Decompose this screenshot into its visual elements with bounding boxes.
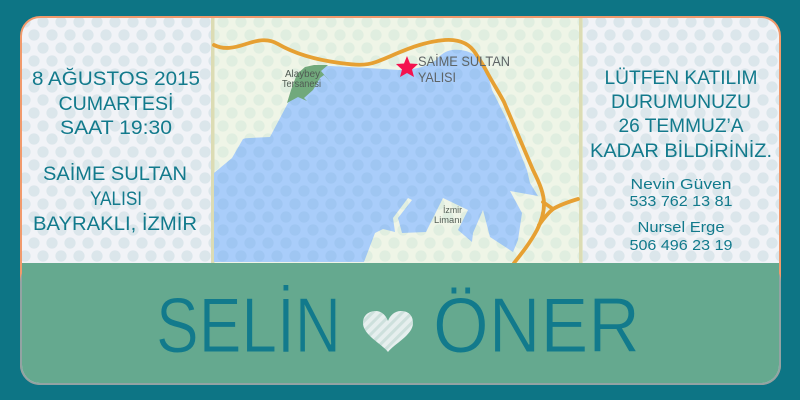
left text: date and venue: SAİME SULTAN [43,162,187,185]
roads [214,40,578,263]
label: shipyard: Tersanesi [282,79,321,90]
label: venue [418,54,510,85]
left text: date and venue: CUMARTESİ [58,92,174,115]
label: port [434,205,462,223]
label: shipyard [282,70,320,87]
name: bride: SELİN [156,281,341,369]
right text: contacts: 533 762 13 81 [630,193,732,210]
label: shipyard: Alaybey [285,69,320,80]
name band [22,263,779,383]
label: venue: YALISI [418,70,456,85]
label: venue: SAİME SULTAN [418,54,510,69]
left text: date and venue [32,67,200,235]
right text: RSVP: KADAR BİLDİRİNİZ. [590,139,772,162]
right text: RSVP: DURUMUNUZU [611,91,751,113]
label: port: Limanı [434,215,462,226]
icon: heart [363,311,413,352]
right text: contacts [630,176,732,254]
right text: contacts: Nursel Erge [638,219,724,236]
right text: contacts: 506 496 23 19 [630,237,732,254]
panel: map [211,18,583,264]
left text: date and venue: BAYRAKLI, İZMİR [33,212,197,235]
right text: contacts: Nevin Güven [630,176,732,193]
name: groom: ÖNER [433,281,640,369]
right text: RSVP [590,67,772,162]
right text: RSVP: 26 TEMMUZ’A [618,115,744,137]
water: bay [214,50,538,262]
left text: date and venue: YALISI [90,188,142,210]
shipyard green area [287,65,333,103]
label: port: İzmir [443,205,462,216]
left text: date and venue: 8 AĞUSTOS 2015 [32,67,200,90]
star marker [396,56,418,77]
left text: date and venue: SAAT 19:30 [60,117,172,139]
right text: RSVP: LÜTFEN KATILIM [604,67,758,89]
